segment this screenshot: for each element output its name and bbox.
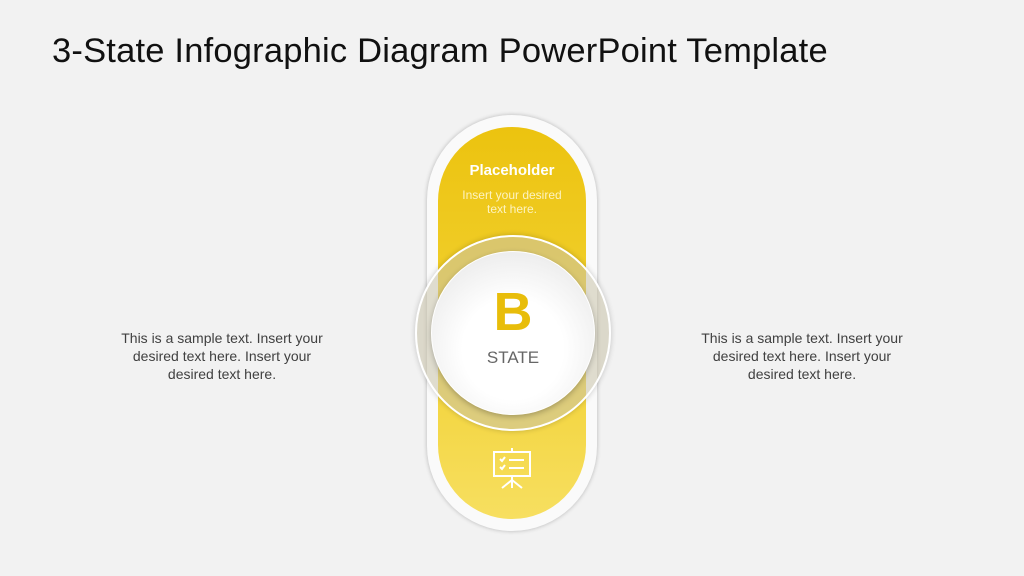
text: placeholder body: Insert your desired text here.	[462, 188, 562, 216]
inner circle	[431, 251, 595, 415]
icon: presentation board	[493, 448, 531, 489]
left text: This is a sample text. Insert your desired text here. Insert your desired text here.	[121, 330, 323, 382]
letter B: B	[494, 282, 532, 342]
outer pill	[427, 115, 597, 531]
heading: placeholder: Placeholder	[469, 162, 555, 179]
ring	[415, 235, 611, 431]
state label: STATE	[487, 348, 539, 367]
title: 3-State Infographic Diagram PowerPoint Template	[52, 32, 828, 70]
yellow pill	[438, 127, 586, 519]
right text: This is a sample text. Insert your desired text here. Insert your desired text here.	[701, 330, 903, 382]
diagram	[412, 112, 614, 534]
